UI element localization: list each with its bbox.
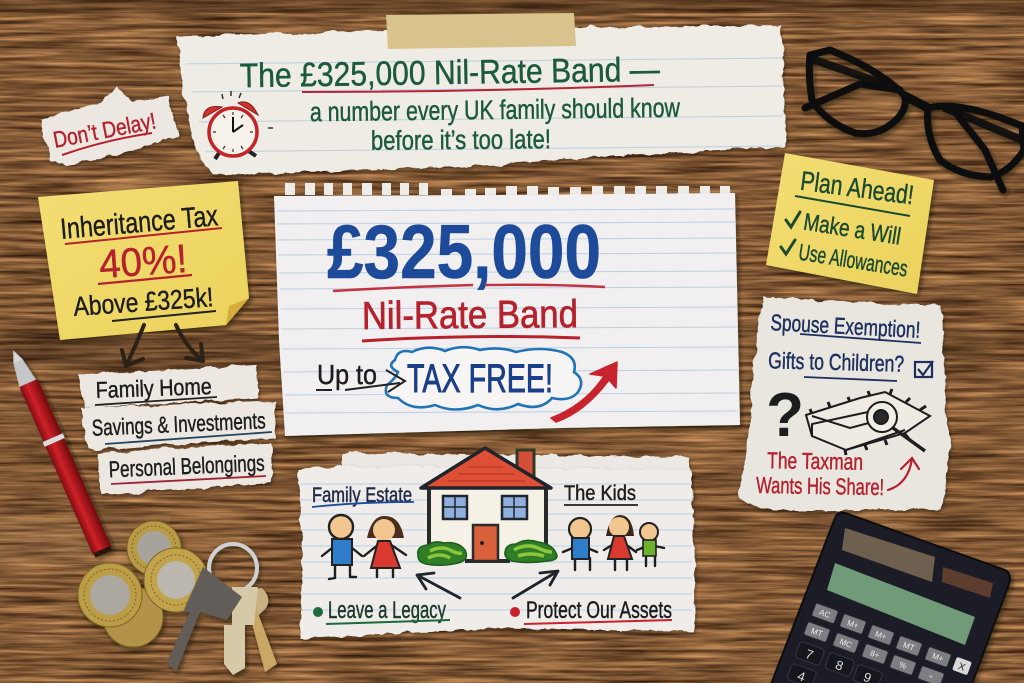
arrow: up to (316, 370, 405, 392)
panel: title torn paper (177, 13, 786, 175)
icon: checked box (915, 361, 933, 377)
coin (78, 563, 142, 627)
coin (144, 548, 208, 612)
window (502, 496, 527, 519)
keypad: 8 (834, 657, 845, 674)
use allowances: Use Allowances (797, 239, 910, 282)
keypad: % (898, 660, 908, 671)
stick figure: toddler (637, 523, 664, 566)
band label: Nil-Rate Band (362, 293, 578, 338)
leave a legacy: Leave a Legacy (328, 597, 446, 624)
strip: personal belongings: Personal Belongings (108, 450, 265, 482)
underline (795, 196, 910, 216)
arrow: red curved (888, 458, 919, 490)
paper (739, 297, 951, 510)
underline (800, 334, 921, 343)
panel: don't delay note (40, 87, 179, 165)
amount: £325,000 (327, 210, 601, 295)
underline (98, 275, 192, 284)
underline (312, 502, 414, 507)
shrub (505, 540, 557, 562)
arrow: to family estate (417, 573, 460, 598)
paper sheet (177, 25, 786, 175)
solar panel small (942, 567, 993, 598)
notebook sheet (274, 193, 740, 436)
arrow: to family home right (176, 325, 203, 361)
strip: savings and investments (81, 401, 276, 450)
subheading line 2: before it’s too late! (371, 124, 551, 156)
keypad: M+ (846, 618, 860, 631)
panel: plan ahead sticky note (766, 153, 934, 294)
spouse exemption: Spouse Exemption! (770, 309, 921, 343)
keypad: M+ (874, 629, 888, 642)
icon: estate blueprint with magnifier (806, 389, 930, 455)
panel: central nil-rate band sheet (274, 183, 740, 436)
arrow: upward red (551, 362, 617, 422)
yellow note (38, 181, 249, 340)
stick figure: girl (604, 515, 636, 570)
red bullet (510, 607, 520, 617)
panel: exemptions note (739, 297, 951, 510)
check mark (786, 212, 800, 227)
yellow note (766, 153, 934, 294)
underline (326, 620, 450, 624)
the kids label: The Kids (564, 482, 636, 505)
heading underline (302, 85, 654, 92)
paper (298, 466, 696, 638)
paper scrap (40, 87, 179, 165)
family estate label: Family Estate (312, 484, 412, 507)
note heading: Inheritance Tax (59, 200, 220, 246)
keypad (787, 603, 972, 683)
keypad: ÷ (927, 671, 935, 682)
ruled lines (276, 209, 738, 413)
arrow: to the kids (513, 571, 558, 598)
keypad: MC (838, 637, 853, 650)
icon: alarm clock (203, 91, 273, 159)
band underline (362, 337, 580, 341)
underline (62, 133, 152, 155)
keypad: X (956, 661, 967, 674)
keypad: 8+ (869, 649, 881, 660)
amount underline (333, 285, 605, 291)
frames (809, 50, 905, 134)
shrub (418, 542, 466, 565)
cloud (386, 347, 581, 410)
stick figure: woman (364, 516, 406, 577)
heading: The £325,000 Nil-Rate Band — (240, 51, 660, 95)
coin (127, 521, 181, 575)
keypad: 7 (804, 646, 815, 663)
tax free text: TAX FREE! (407, 357, 553, 401)
make a will: Make a Will (802, 209, 903, 251)
temple arms (815, 60, 1022, 140)
strip: family home (79, 365, 258, 408)
panel: family estate sheet (298, 448, 696, 638)
green bullet (313, 607, 323, 617)
underline (804, 377, 897, 381)
taxman text line 2: Wants His Share! (756, 472, 884, 500)
icon: calculator (765, 513, 1010, 683)
underline (112, 311, 216, 321)
underline (65, 228, 222, 244)
icon: house (418, 448, 557, 565)
paper back layer (342, 453, 694, 500)
bridge (905, 96, 928, 108)
stick figure: boy (563, 518, 597, 570)
label: Don’t Delay! (51, 107, 158, 153)
ruled lines (300, 484, 692, 610)
strip: family home: Family Home (95, 373, 212, 403)
threshold text: Above £325k! (72, 282, 214, 322)
taxman text line 1: The Taxman (767, 447, 863, 475)
check mark (781, 240, 795, 254)
question mark: ? (766, 381, 804, 450)
heading: Plan Ahead! (799, 166, 916, 210)
icon: red pen (4, 345, 114, 558)
strip: personal belongings (97, 443, 273, 495)
panel: inheritance tax sticky note (38, 181, 249, 340)
icon: keys (167, 544, 277, 675)
folded corner (226, 298, 249, 325)
strip: savings and investments: Savings & Investments (91, 407, 266, 441)
icon: glasses (805, 50, 1024, 190)
arrow: to family home left (122, 325, 144, 366)
protect our assets: Protect Our Assets (526, 597, 672, 624)
coin (103, 587, 163, 647)
keypad: M+ (931, 651, 945, 664)
solar panel (842, 528, 935, 582)
notebook perforation tabs (285, 183, 730, 196)
stick figure: man (322, 515, 362, 579)
keypad: AC (818, 608, 832, 620)
underline (524, 620, 672, 624)
keypad: MT (902, 640, 916, 653)
subheading line 1: a number every UK family should know (310, 93, 680, 127)
40 percent: 40%! (98, 237, 189, 287)
ruled lines (180, 58, 782, 152)
display (827, 563, 975, 645)
window (443, 496, 467, 519)
masking tape (386, 13, 576, 49)
icon: pound coins (78, 521, 208, 647)
up to label: Up to (317, 359, 377, 390)
keypad: MT (810, 626, 824, 639)
underline (564, 504, 638, 506)
panel: assets list (79, 365, 276, 495)
door (473, 525, 498, 561)
calculator body (765, 513, 1010, 683)
gifts to children: Gifts to Children? (768, 347, 905, 377)
